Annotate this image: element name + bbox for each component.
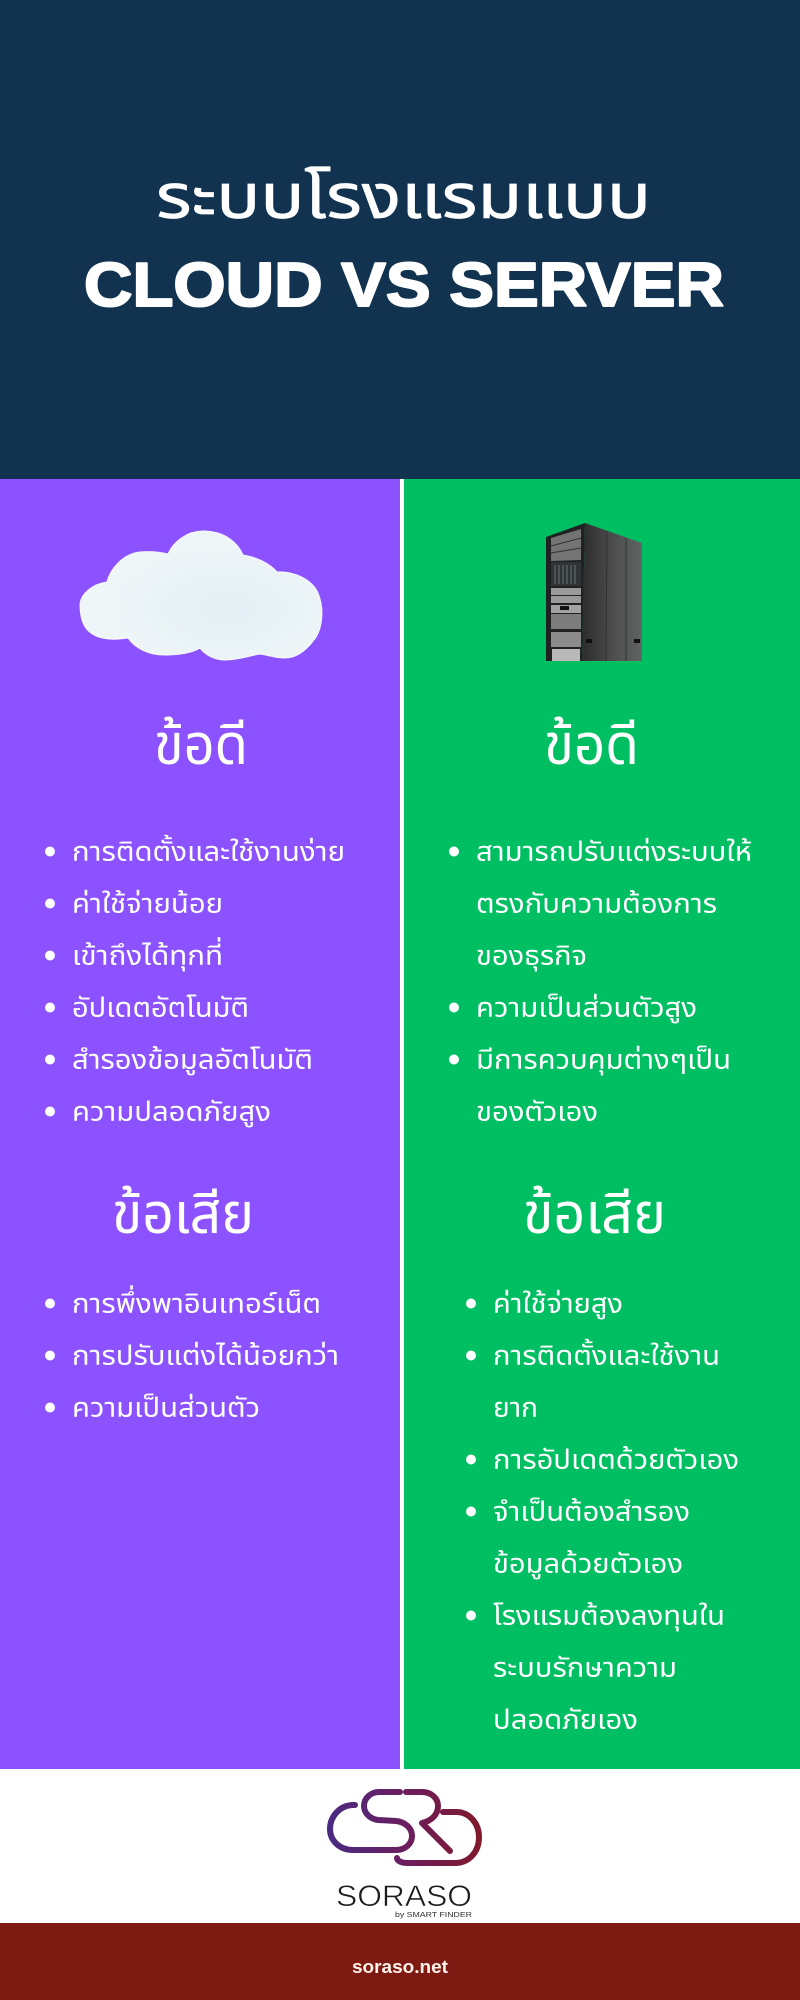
item: การปรับแต่งได้น้อยกว่า	[72, 1340, 339, 1370]
item: ข้อมูลด้วยตัวเอง	[493, 1548, 683, 1580]
panel: cloud	[0, 479, 400, 1769]
item	[466, 1600, 725, 1734]
logo tagline: by SMART FINDER	[395, 1912, 472, 1919]
item: ของธุรกิจ	[476, 940, 587, 972]
item	[466, 1338, 720, 1422]
panel: server	[404, 479, 800, 1769]
list: server cons	[466, 1288, 739, 1734]
item: ของตัวเอง	[476, 1096, 598, 1126]
icon: cloud	[80, 531, 322, 660]
item: ค่าใช้จ่ายสูง	[493, 1288, 623, 1320]
item	[466, 1496, 690, 1580]
item: ตรงกับความต้องการ	[476, 888, 717, 918]
item: การติดตั้งและใช้งาน	[493, 1338, 720, 1370]
item: สามารถปรับแต่งระบบให้	[476, 836, 752, 866]
list: cloud cons	[45, 1284, 339, 1422]
item: ความเป็นส่วนตัว	[72, 1392, 260, 1422]
item	[449, 1044, 731, 1126]
heading: server cons: ข้อเสีย	[523, 1182, 666, 1245]
item: อัปเดตอัตโนมัติ	[72, 992, 249, 1022]
footer band	[0, 1923, 800, 2000]
logo mark	[330, 1792, 479, 1863]
icon: server rack	[546, 523, 642, 661]
item: ปลอดภัยเอง	[493, 1704, 638, 1734]
item: มีการควบคุมต่างๆเป็น	[476, 1044, 731, 1076]
heading: cloud cons: ข้อเสีย	[112, 1182, 254, 1245]
title: Cloud vs Server: CLOUD VS SERVER	[84, 251, 724, 320]
title: Thai line: ระบบโรงแรมแบบ	[156, 163, 651, 232]
item: ค่าใช้จ่ายน้อย	[72, 888, 223, 918]
item: การติดตั้งและใช้งานง่าย	[72, 834, 345, 866]
item	[45, 936, 223, 972]
item	[449, 836, 752, 972]
logo wordmark: SORASO	[336, 1880, 472, 1913]
item: จำเป็นต้องสำรอง	[493, 1496, 690, 1526]
logo: Soraso	[330, 1792, 479, 1919]
item: ระบบรักษาความ	[493, 1652, 677, 1682]
item: ความเป็นส่วนตัวสูง	[476, 992, 697, 1024]
item: เข้าถึงได้ทุกที่	[72, 936, 223, 972]
list: server pros	[449, 836, 752, 1126]
item: ความปลอดภัยสูง	[72, 1096, 271, 1128]
item: ยาก	[493, 1392, 538, 1422]
list: cloud pros	[45, 834, 345, 1128]
header panel	[0, 0, 800, 479]
item: การอัปเดตด้วยตัวเอง	[493, 1444, 739, 1474]
footer url: soraso.net	[352, 1957, 448, 1977]
heading: cloud pros: ข้อดี	[154, 713, 248, 776]
item: การพึ่งพาอินเทอร์เน็ต	[72, 1284, 321, 1318]
heading: server pros: ข้อดี	[544, 713, 639, 776]
item: สำรองข้อมูลอัตโนมัติ	[72, 1044, 313, 1076]
item: โรงแรมต้องลงทุนใน	[493, 1600, 725, 1632]
